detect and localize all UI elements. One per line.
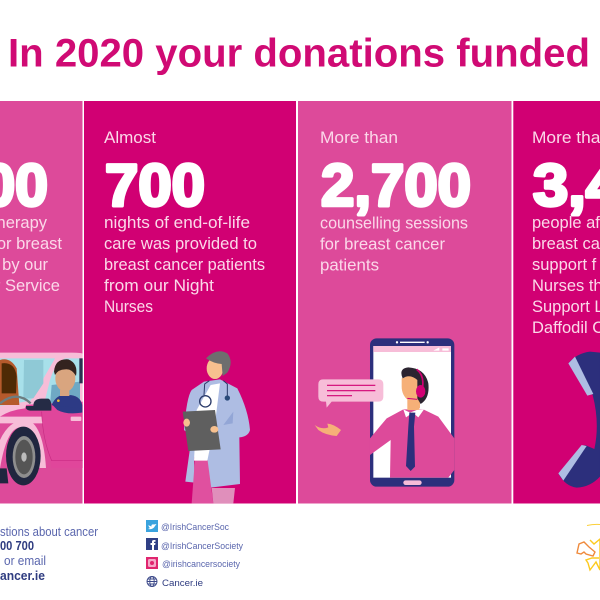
lead-in: More than, panel 3: More than xyxy=(320,129,398,147)
description: panel 3 xyxy=(320,214,468,274)
footer: contact details: 00 700 xyxy=(0,539,34,553)
panel: chemotherapy transport xyxy=(0,101,83,504)
description: panel 2: from our Night xyxy=(104,277,214,295)
illustration: nurse with clipboard xyxy=(183,351,250,503)
description: panel 4: people af xyxy=(532,214,600,232)
description: panel 4: support f xyxy=(532,256,597,274)
footer: contact details: stions about cancer xyxy=(0,525,98,539)
title: In 2020 your donations funded xyxy=(8,32,590,76)
illustration: pink car with driver and passenger xyxy=(0,353,83,485)
description: panel 4 xyxy=(532,214,600,337)
icon: telephone handset xyxy=(558,352,600,488)
description: panel 3: for breast cancer xyxy=(320,236,446,254)
description: panel 3: patients xyxy=(320,256,379,274)
description: panel 4: breast ca xyxy=(532,235,600,253)
stat number: 700: 700 xyxy=(105,152,205,218)
link: Cancer.ie: Cancer.ie xyxy=(162,578,203,589)
description: panel 2: Nurses xyxy=(104,298,153,316)
panel: support line xyxy=(513,101,600,504)
illustration: counsellor on phone screen xyxy=(315,338,454,487)
handle: facebook: @IrishCancerSociety xyxy=(161,541,243,552)
description: panel 1: by our xyxy=(2,256,49,274)
footer: contact details: ancer.ie xyxy=(0,569,45,583)
description: panel 2: care was provided to xyxy=(104,235,257,253)
icon: globe xyxy=(147,576,157,586)
stat number: 2,700: 2,700 xyxy=(321,152,471,218)
panel: night nurses xyxy=(84,101,296,504)
description: panel 1 xyxy=(0,214,62,295)
handle: instagram: @irishcancersociety xyxy=(162,559,240,570)
lead-in: Almost: Almost xyxy=(104,129,156,147)
logo: daffodil xyxy=(577,524,600,570)
footer: contact details xyxy=(0,525,98,583)
footer: social links xyxy=(146,520,243,589)
icon: facebook xyxy=(146,538,158,550)
description: panel 2: nights of end-of-life xyxy=(104,214,250,232)
description: panel 2 xyxy=(104,214,265,316)
footer: contact details: or email xyxy=(4,554,46,568)
icon: instagram xyxy=(146,557,158,569)
description: panel 3: counselling sessions xyxy=(320,214,468,232)
handle: twitter: @IrishCancerSoc xyxy=(161,522,229,533)
icon: twitter xyxy=(146,520,158,532)
description: panel 2: breast cancer patients xyxy=(104,256,265,274)
panel: counselling xyxy=(298,101,512,504)
